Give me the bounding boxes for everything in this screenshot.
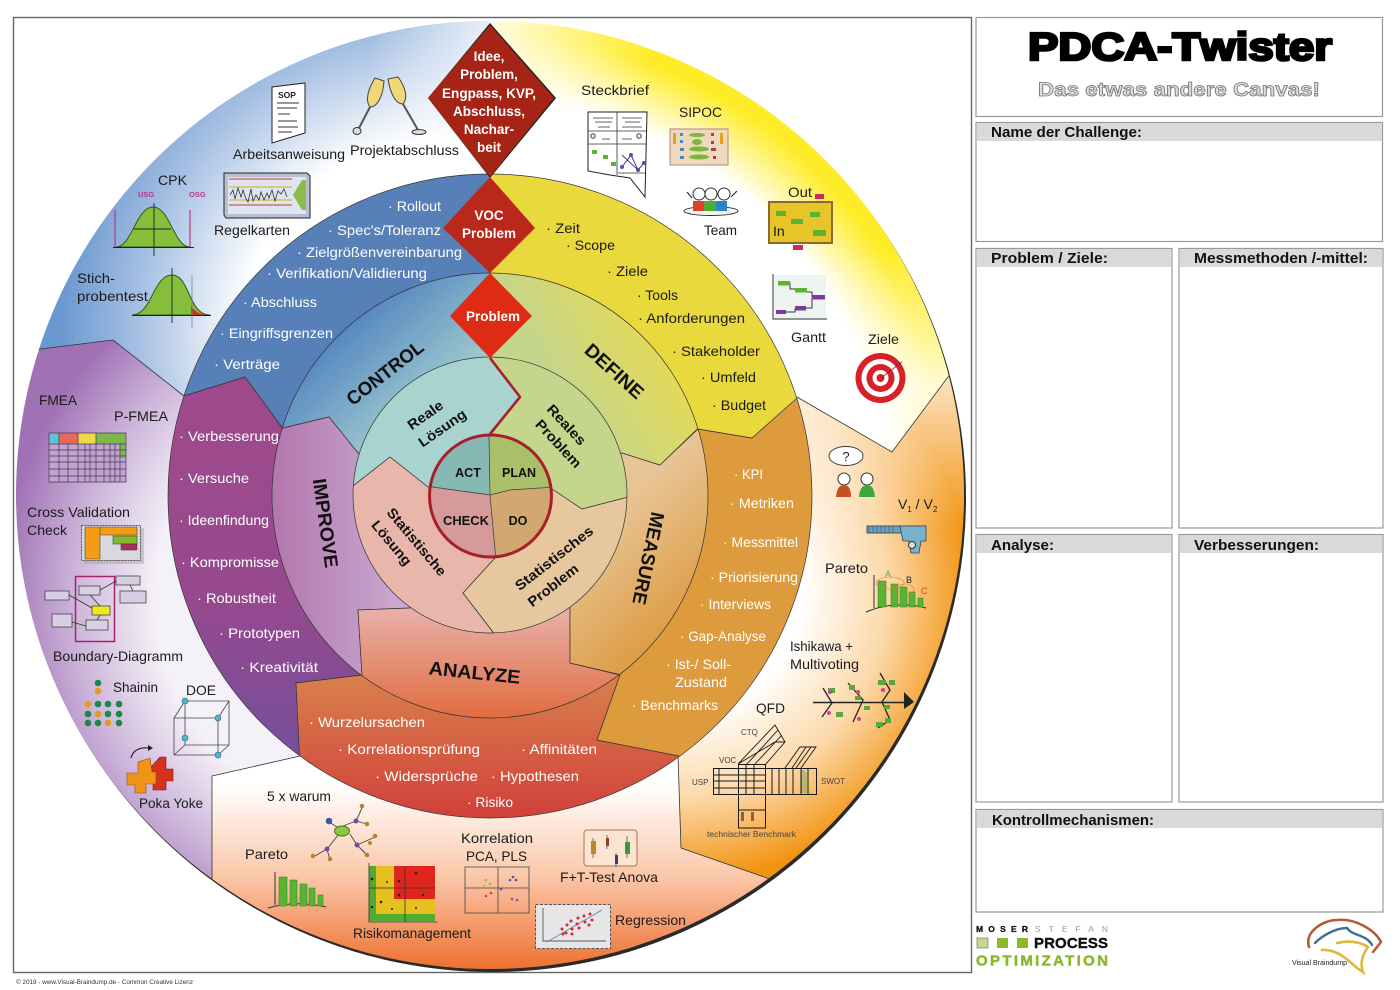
panel: problem / goals: Problem / Ziele:: [991, 250, 1108, 267]
panel: control mechanisms: Kontrollmechanismen:: [992, 812, 1154, 829]
measure tasks: · Messmittel: [723, 534, 798, 550]
measure tasks: Zustand: [675, 674, 727, 690]
define tasks: [546, 220, 766, 413]
tool: caliper V1 / V2: / V: [912, 496, 933, 512]
tool: DOE: DOE: [186, 682, 216, 698]
analyze tasks: · Hypothesen: [491, 768, 579, 784]
panel: problem / goals: [976, 248, 1172, 528]
tool: Arbeitsanweisung: Arbeitsanweisung: [233, 146, 345, 162]
tool: QFD: VOC: [719, 756, 737, 765]
tool: Pareto bars, analyze: [245, 846, 326, 908]
outer ring: tools per phase: [0, 0, 1000, 990]
tool: Regression: [536, 904, 686, 948]
define tasks: · Zeit: [546, 220, 580, 236]
tool: Steckbrief: Steckbrief: [581, 82, 649, 98]
tool: caliper V1 / V2: 1: [907, 505, 912, 514]
tool: Regression: Regression: [615, 912, 686, 928]
tool: Boundary-Diagramm: [45, 576, 183, 664]
measure tasks: · Priorisierung: [710, 569, 798, 585]
PDCA labels: PLAN: [502, 466, 536, 480]
tool: Pareto ABC: [825, 560, 928, 612]
panel: improvements: [1179, 534, 1383, 802]
improve tasks: [179, 428, 318, 675]
tool: QFD: [692, 700, 845, 839]
IMPROVE: IMPROVE: [308, 477, 341, 569]
tool: caliper V1 / V2: [867, 496, 938, 553]
analyze tasks: · Widersprüche: [375, 768, 478, 784]
analyze tasks: · Korrelationsprüfung: [338, 741, 480, 757]
tool: Stichprobentest: probentest: [77, 288, 148, 304]
tool: Cross Validation Check: Check: [27, 522, 68, 538]
improve tasks: · Versuche: [179, 470, 249, 486]
measure tasks: · Interviews: [700, 596, 771, 612]
tool: Korrelation: [461, 830, 533, 913]
real problem: [532, 401, 590, 471]
tool: Projektabschluss: [350, 77, 459, 158]
improve tasks: · Robustheit: [197, 590, 276, 606]
diamond: problem: Problem: [466, 309, 520, 324]
define tasks: · Umfeld: [701, 369, 756, 385]
logo: Moser Stefan Process Optimization: OPTIMIZATION: [976, 952, 1108, 970]
panel: analysis: Analyse:: [991, 537, 1054, 554]
control tasks: · Verifikation/Validierung: [267, 265, 427, 281]
improve tasks: · Verbesserung: [179, 428, 279, 444]
diamond: idea: beit: [477, 140, 501, 155]
tool: 5 x warum: [267, 788, 377, 861]
fourth ring: problem and solution: [353, 358, 627, 633]
panel: control mechanisms: [976, 810, 1383, 912]
tool: Risikomanagement: Risikomanagement: [353, 925, 471, 941]
analyze tasks: · Affinitäten: [521, 741, 597, 757]
second ring: DMAIC tasks: [168, 174, 812, 818]
center PDCA circle: [425, 430, 556, 560]
tool: Risikomanagement: [353, 863, 471, 941]
measure tasks: [632, 466, 798, 713]
improve tasks: · Kreativität: [240, 659, 318, 675]
analyze tasks: · Wurzelursachen: [309, 714, 425, 730]
MEASURE: MEASURE: [627, 510, 667, 606]
PDCA labels: DO: [509, 514, 528, 528]
improve tasks: · Ideenfindung: [179, 512, 269, 528]
tool: QFD: technischer Benchmark: [707, 830, 797, 839]
PDCA labels: [443, 466, 536, 528]
define tasks: · Tools: [637, 287, 678, 303]
wheel rim shadow: [18, 24, 966, 972]
measure tasks: · Ist-/ Soll-: [666, 656, 731, 672]
tool: Korrelation: PCA, PLS: [466, 848, 527, 864]
diamond: idea: Abschluss,: [453, 104, 525, 119]
tool: Pareto ABC: Pareto: [825, 560, 868, 576]
tool: FMEA: FMEA: [39, 392, 78, 408]
tool: Boundary-Diagramm: Boundary-Diagramm: [53, 648, 183, 664]
panel: improvements: Verbesserungen:: [1194, 537, 1319, 554]
tool: Projektabschluss: Projektabschluss: [350, 142, 459, 158]
statistical solution: Statistische: [384, 504, 450, 579]
panel: measuring methods: Messmethoden /-mittel:: [1194, 250, 1368, 267]
tool: Gantt: Gantt: [791, 329, 826, 345]
tool: SIPOC: SIPOC: [679, 104, 722, 120]
diamond: idea: Idee,: [474, 49, 504, 64]
define tasks: · Scope: [566, 237, 615, 253]
statistical problem: [512, 522, 596, 610]
tool: QFD: USP: [692, 778, 708, 787]
define tasks: · Anforderungen: [638, 310, 745, 326]
tool: 5 x warum: 5 x warum: [267, 788, 331, 804]
tool: caliper V1 / V2: V: [898, 496, 907, 512]
tool: Pareto ABC: A: [885, 569, 891, 579]
tool: In/Out board: Out: [788, 184, 812, 200]
real problem: Problem: [532, 416, 585, 471]
control tasks: · Rollout: [388, 198, 441, 214]
logo: Moser Stefan Process Optimization: [976, 924, 1108, 970]
analyze tasks: · Risiko: [467, 794, 513, 810]
tool: QFD: QFD: [756, 700, 785, 716]
measure tasks: · Metriken: [730, 495, 794, 511]
tool: In/Out board: In: [773, 223, 785, 239]
tool: Arbeitsanweisung: [233, 83, 345, 162]
logo: Moser Stefan Process Optimization: STEFAN: [1035, 924, 1108, 934]
tool: Stichprobentest: [77, 268, 211, 328]
inner ring labels: [368, 397, 596, 610]
define tasks: · Budget: [712, 397, 766, 413]
tool: Shainin: [85, 679, 158, 726]
tool: Cross Validation Check: [27, 504, 144, 564]
tool: SIPOC: [670, 104, 728, 165]
tool: CPK: USG: [138, 190, 154, 199]
PDCA labels: CHECK: [443, 514, 489, 528]
tool: Ishikawa: [790, 638, 914, 728]
tool: Ishikawa: Multivoting: [790, 656, 859, 672]
measure tasks: · Gap-Analyse: [680, 628, 766, 644]
control tasks: [214, 198, 462, 372]
tool: Team: [684, 188, 738, 238]
tool: Regelkarten: Regelkarten: [214, 222, 290, 238]
tool: Cross Validation Check: Cross Validation: [27, 504, 130, 520]
tool: CPK: OSG: [189, 190, 206, 199]
statistical problem: Statistisches: [512, 522, 596, 594]
diamond: VOC problem: Problem: [462, 226, 516, 241]
control tasks: · Abschluss: [243, 294, 317, 310]
panel: challenge name: [976, 122, 1382, 242]
PDCA twister wheel: [0, 0, 1000, 990]
diamond: VOC problem: VOC: [474, 208, 504, 223]
tool: F+T-Test Anova: [560, 830, 658, 885]
define tasks: · Ziele: [607, 263, 648, 279]
improve tasks: · Kompromisse: [181, 554, 279, 570]
canvas frame: [14, 18, 972, 972]
diamond: idea: Problem,: [460, 67, 518, 82]
tool: QFD: CTQ: [741, 728, 758, 737]
logo: Moser Stefan Process Optimization: MOSER: [976, 924, 1028, 934]
third ring: DMAIC phases: [272, 273, 708, 718]
tool: Ziele target: Ziele: [868, 331, 899, 347]
tool: Regelkarten: [214, 173, 310, 238]
real problem: Reales: [544, 401, 590, 448]
measure tasks: · Benchmarks: [632, 697, 718, 713]
tool: Korrelation: Korrelation: [461, 830, 533, 846]
control tasks: · Eingriffsgrenzen: [220, 325, 333, 341]
tool: Stichprobentest: Stich-: [77, 270, 115, 286]
diamond: idea: [428, 23, 556, 178]
tool: Ishikawa: Ishikawa +: [790, 638, 853, 654]
real solution: Lösung: [415, 406, 469, 450]
panel: title: [976, 18, 1382, 116]
logo: Visual Braindump: Visual Braindump: [1292, 958, 1347, 967]
panel: analysis: [976, 534, 1172, 802]
diamond: VOC problem: [443, 177, 535, 273]
tool: customer interview figures: ?: [842, 449, 850, 464]
tool: Shainin: Shainin: [113, 679, 158, 695]
copyright note: © 2019 - www.Visual-Braindump.de - Common Creative Lizenz: [16, 979, 193, 986]
real solution: Reale: [404, 397, 446, 433]
real solution: [404, 397, 469, 450]
diamond: idea: Nachar-: [464, 122, 514, 137]
logo: Visual Braindump: [1292, 920, 1381, 972]
diamond: problem: [450, 273, 532, 358]
CONTROL: CONTROL: [343, 337, 429, 410]
tool: CPK: CPK: [158, 172, 188, 188]
panel: measuring methods: [1179, 248, 1383, 528]
tool: Pareto bars, analyze: Pareto: [245, 846, 288, 862]
tool: QFD: SWOT: [821, 777, 845, 786]
tool: FMEA: P-FMEA: [114, 408, 169, 424]
control tasks: · Verträge: [214, 356, 280, 372]
tool: caliper V1 / V2: 2: [933, 505, 938, 514]
diamond: idea: Engpass, KVP,: [442, 86, 536, 101]
tool: In/Out board: [769, 184, 832, 250]
define tasks: · Stakeholder: [672, 343, 760, 359]
analyze tasks: [309, 714, 597, 810]
tool: Poka Yoke: [127, 745, 203, 811]
tool: Pareto ABC: B: [906, 575, 912, 585]
tool: Steckbrief: [581, 82, 649, 197]
phase labels: [308, 337, 667, 689]
ANALYZE: ANALYZE: [428, 658, 521, 689]
panel: challenge name: Name der Challenge:: [991, 124, 1142, 141]
control tasks: · Zielgrößenvereinbarung: [297, 244, 462, 260]
tool: FMEA: [39, 392, 169, 482]
panel: title: Das etwas andere Canvas!: [1038, 80, 1320, 101]
statistical problem: Problem: [524, 560, 581, 610]
tool: customer interview figures: [829, 446, 875, 497]
improve tasks: · Prototypen: [219, 625, 300, 641]
tool: Gantt: [773, 274, 827, 345]
statistical solution: Lösung: [368, 517, 415, 569]
tool: Poka Yoke: Poka Yoke: [139, 795, 203, 811]
tool: Pareto ABC: C: [921, 586, 928, 596]
DEFINE: DEFINE: [580, 340, 647, 404]
tool: Arbeitsanweisung: SOP: [278, 90, 296, 100]
control tasks: · Spec's/Toleranz: [328, 222, 441, 238]
tool: Ziele target: [856, 331, 906, 403]
PDCA labels: ACT: [455, 466, 481, 480]
tool: DOE: [174, 682, 229, 758]
tool: Team: Team: [704, 222, 737, 238]
tool: F+T-Test Anova: F+T-Test Anova: [560, 869, 658, 885]
measure tasks: · KPI: [734, 466, 763, 482]
logo: Moser Stefan Process Optimization: PROCESS: [1034, 935, 1108, 952]
twist line: [490, 358, 520, 434]
tool: CPK: [113, 172, 206, 256]
panel: title: PDCA-Twister: [1028, 26, 1332, 69]
